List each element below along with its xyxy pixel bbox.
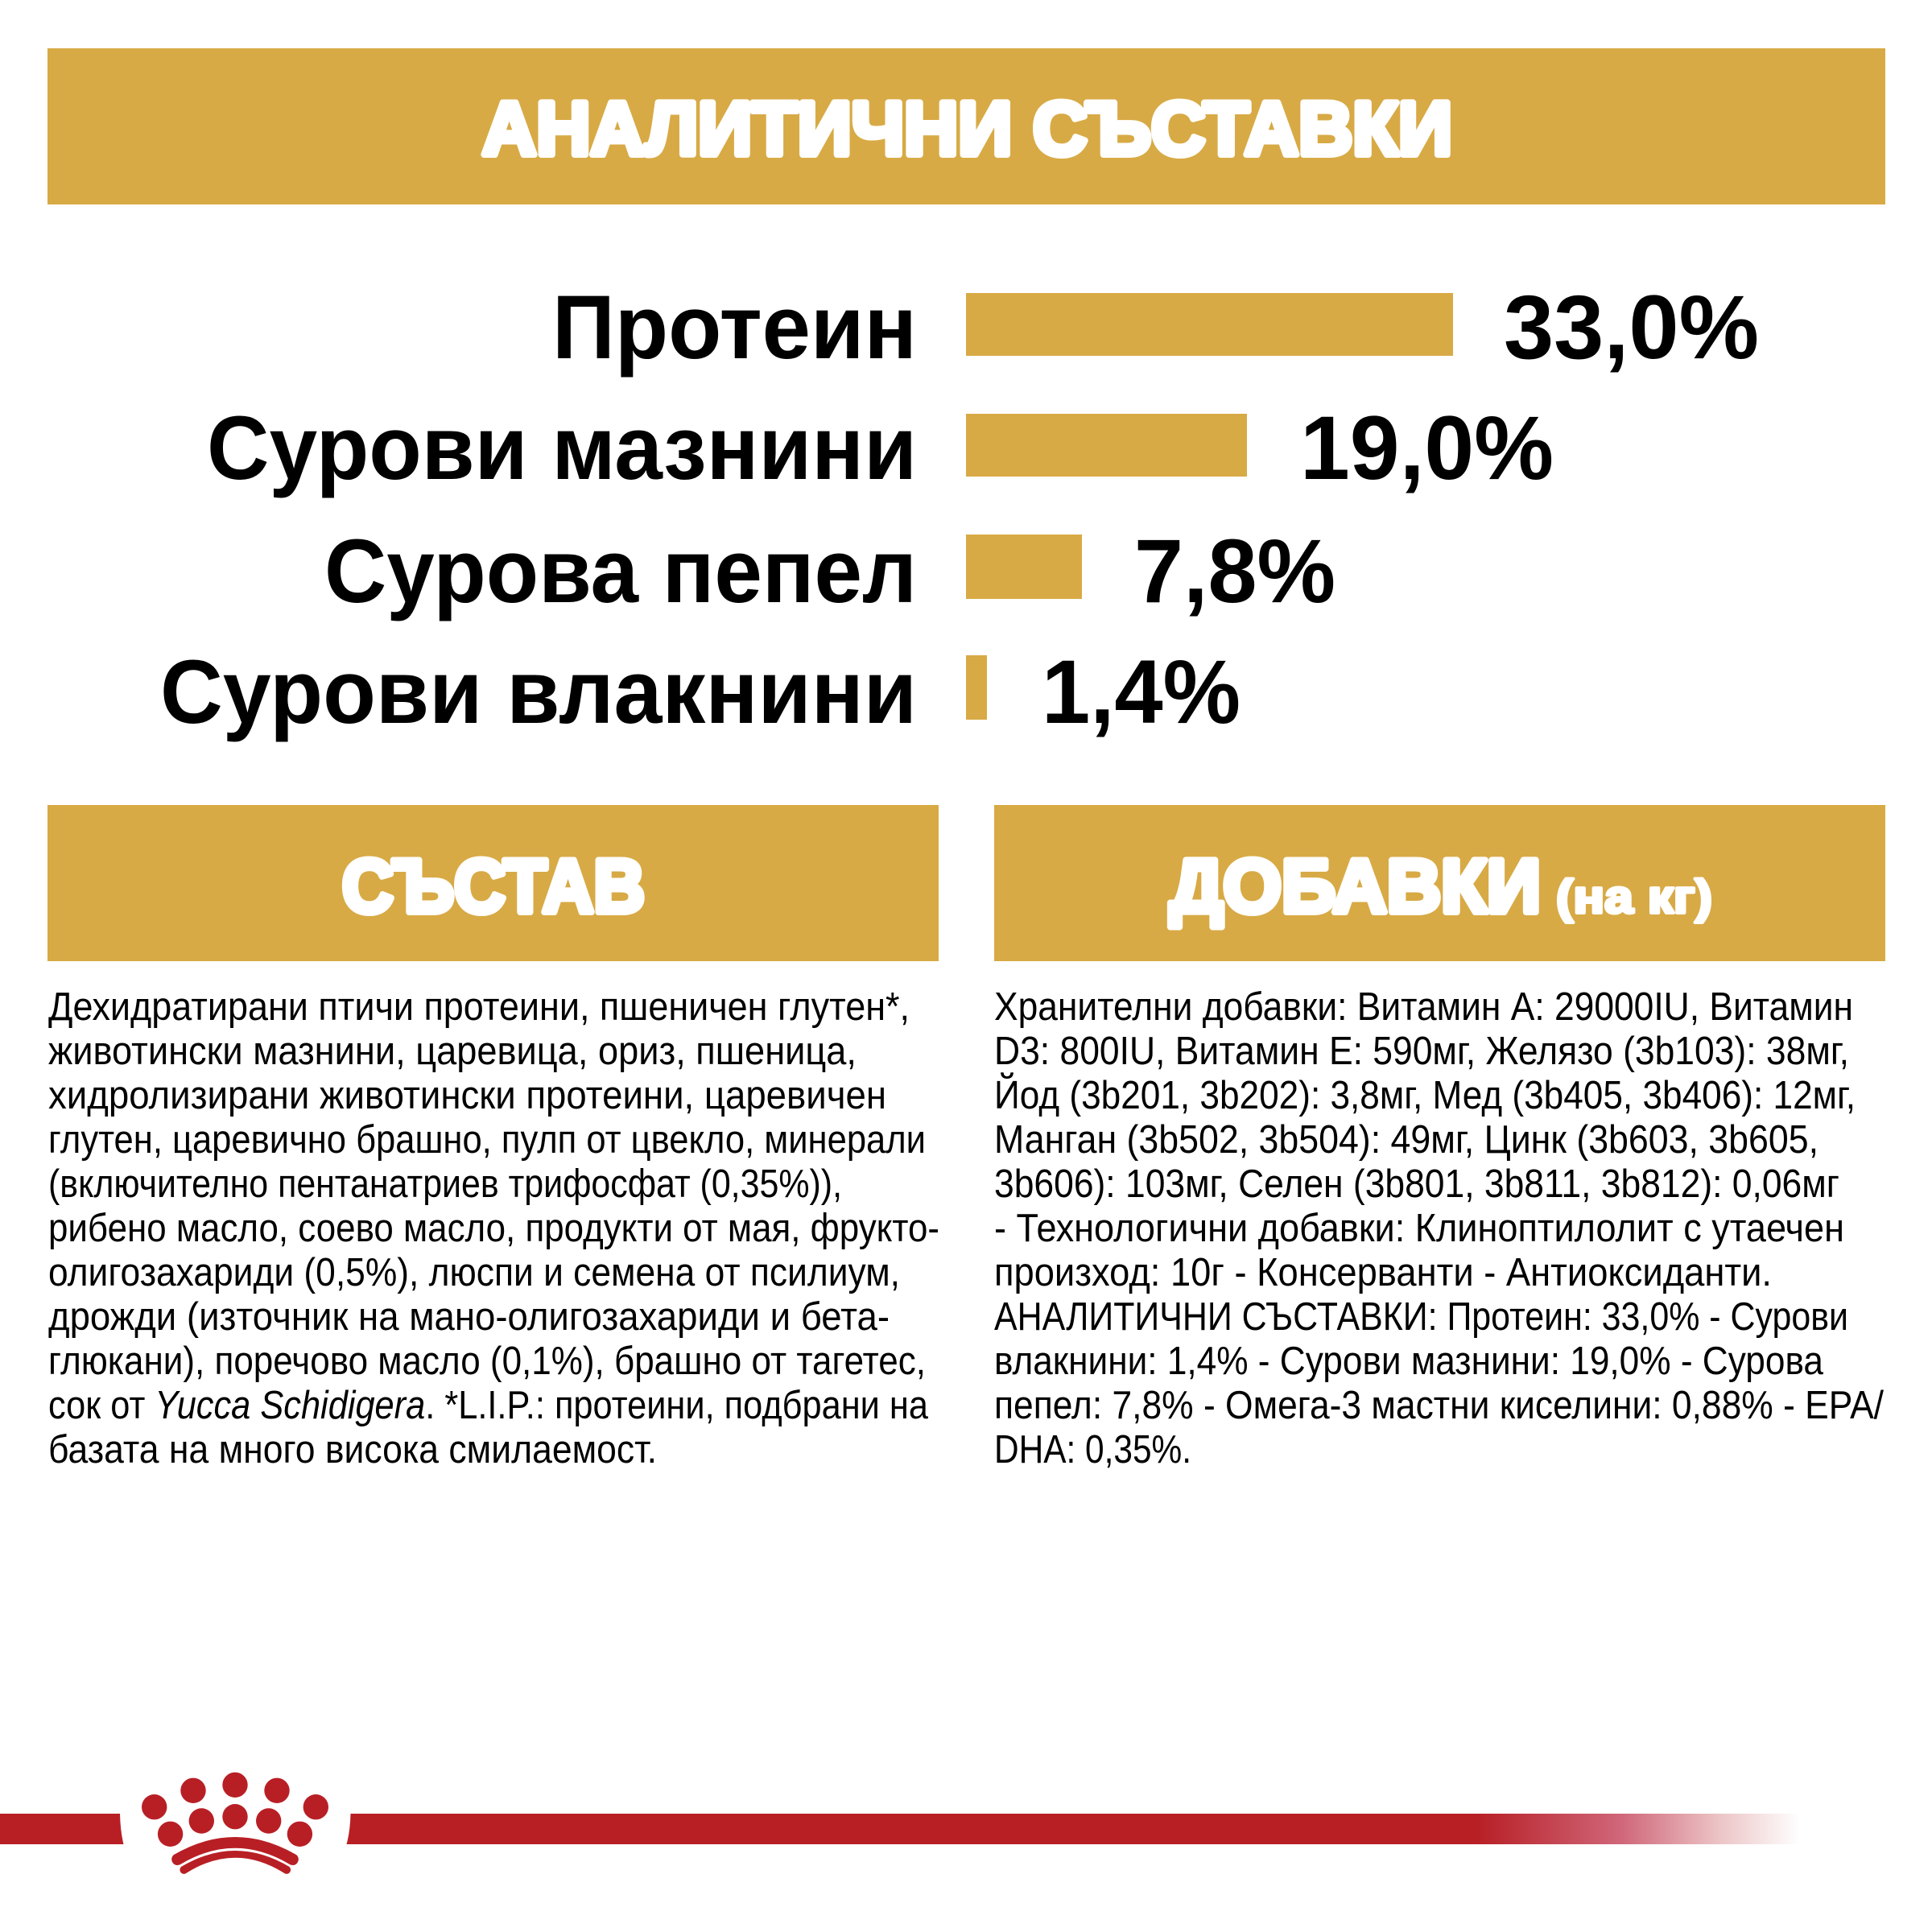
text block: composition: рибено масло, соево масло, продукти от мая, фрукто-	[48, 1207, 939, 1250]
text block: composition: олигозахариди (0,5%), люспи и семена от псилиум,	[48, 1251, 900, 1294]
panel: additives heading	[994, 805, 1885, 961]
panel: composition heading	[47, 805, 939, 961]
row: crude fibre: 1,4%	[1042, 642, 1241, 742]
text block: composition: сок от Yucca Schidigera. *L.I.P.: протеини, подбрани на	[48, 1384, 929, 1427]
bar chart: analytical constituents	[160, 277, 1759, 742]
text block: additives: 3b606): 103мг, Селен (3b801, 3b811, 3b812): 0,06мг	[994, 1162, 1839, 1206]
text block: additives: Хранителни добавки: Витамин А: 29000IU, Витамин	[994, 985, 1853, 1029]
row: crude ash	[324, 521, 1335, 621]
text block: composition: дрожди (източник на мано-олигозахариди и бета-	[48, 1295, 890, 1339]
text block: composition: глюкани), поречово масло (0,1%), брашно от тагетес,	[48, 1340, 926, 1383]
row: crude fibre: Сурови влакнини	[160, 642, 917, 742]
title banner: analytical constituents	[47, 48, 1885, 204]
text block: additives: - Технологични добавки: Клиноптилолит с утаечен	[994, 1207, 1844, 1250]
icon: royal crown logo	[142, 1773, 328, 1874]
footer ribbon: red band right of crown, fading out	[346, 1814, 1803, 1844]
footer ribbon: red band left of crown	[0, 1814, 124, 1844]
row: protein	[552, 277, 1759, 378]
row: crude ash: Сурова пепел	[324, 521, 917, 621]
text block: additives: влакнини: 1,4% - Сурови мазнини: 19,0% - Сурова	[994, 1340, 1824, 1383]
text block: composition: глутен, царевично брашно, пулп от цвекло, минерали	[48, 1118, 926, 1162]
row: crude fat	[207, 398, 1554, 498]
text block: additives: произход: 10г - Консерванти - Антиоксиданти.	[994, 1251, 1772, 1294]
text block: composition: хидролизирани животински протеини, царевичен	[48, 1074, 886, 1117]
text block: additives	[994, 985, 1884, 1472]
row: protein: 33,0%	[1504, 277, 1759, 378]
text block: additives: D3: 800IU, Витамин Е: 590мг, Желязо (3b103): 38мг,	[994, 1030, 1849, 1073]
row: crude ash: 7,8%	[1134, 521, 1335, 621]
row: crude fat: 19,0%	[1300, 398, 1554, 498]
text block: composition: Дехидратирани птичи протеини, пшеничен глутен*,	[48, 985, 910, 1029]
panel: composition heading: СЪСТАВ	[342, 844, 645, 928]
text block: composition: (включително пентанатриев трифосфат (0,35%)),	[48, 1162, 842, 1206]
panel: additives heading: ДОБАВКИ	[1170, 844, 1541, 928]
text block: composition: базата на много висока смилаемост.	[48, 1428, 657, 1472]
title banner: analytical constituents: АНАЛИТИЧНИ СЪСТАВКИ	[482, 86, 1452, 171]
text block: composition	[48, 985, 939, 1472]
row: protein: Протеин	[552, 277, 917, 378]
text block: composition: животински мазнини, царевица, ориз, пшеница,	[48, 1030, 857, 1073]
text block: additives: Манган (3b502, 3b504): 49мг, Цинк (3b603, 3b605,	[994, 1118, 1818, 1162]
row: crude fat: Сурови мазнини	[207, 398, 917, 498]
text block: additives: Йод (3b201, 3b202): 3,8мг, Мед (3b405, 3b406): 12мг,	[994, 1073, 1856, 1117]
panel: additives heading: (на кг)	[1556, 871, 1712, 923]
text block: additives: DHA: 0,35%.	[994, 1428, 1191, 1472]
